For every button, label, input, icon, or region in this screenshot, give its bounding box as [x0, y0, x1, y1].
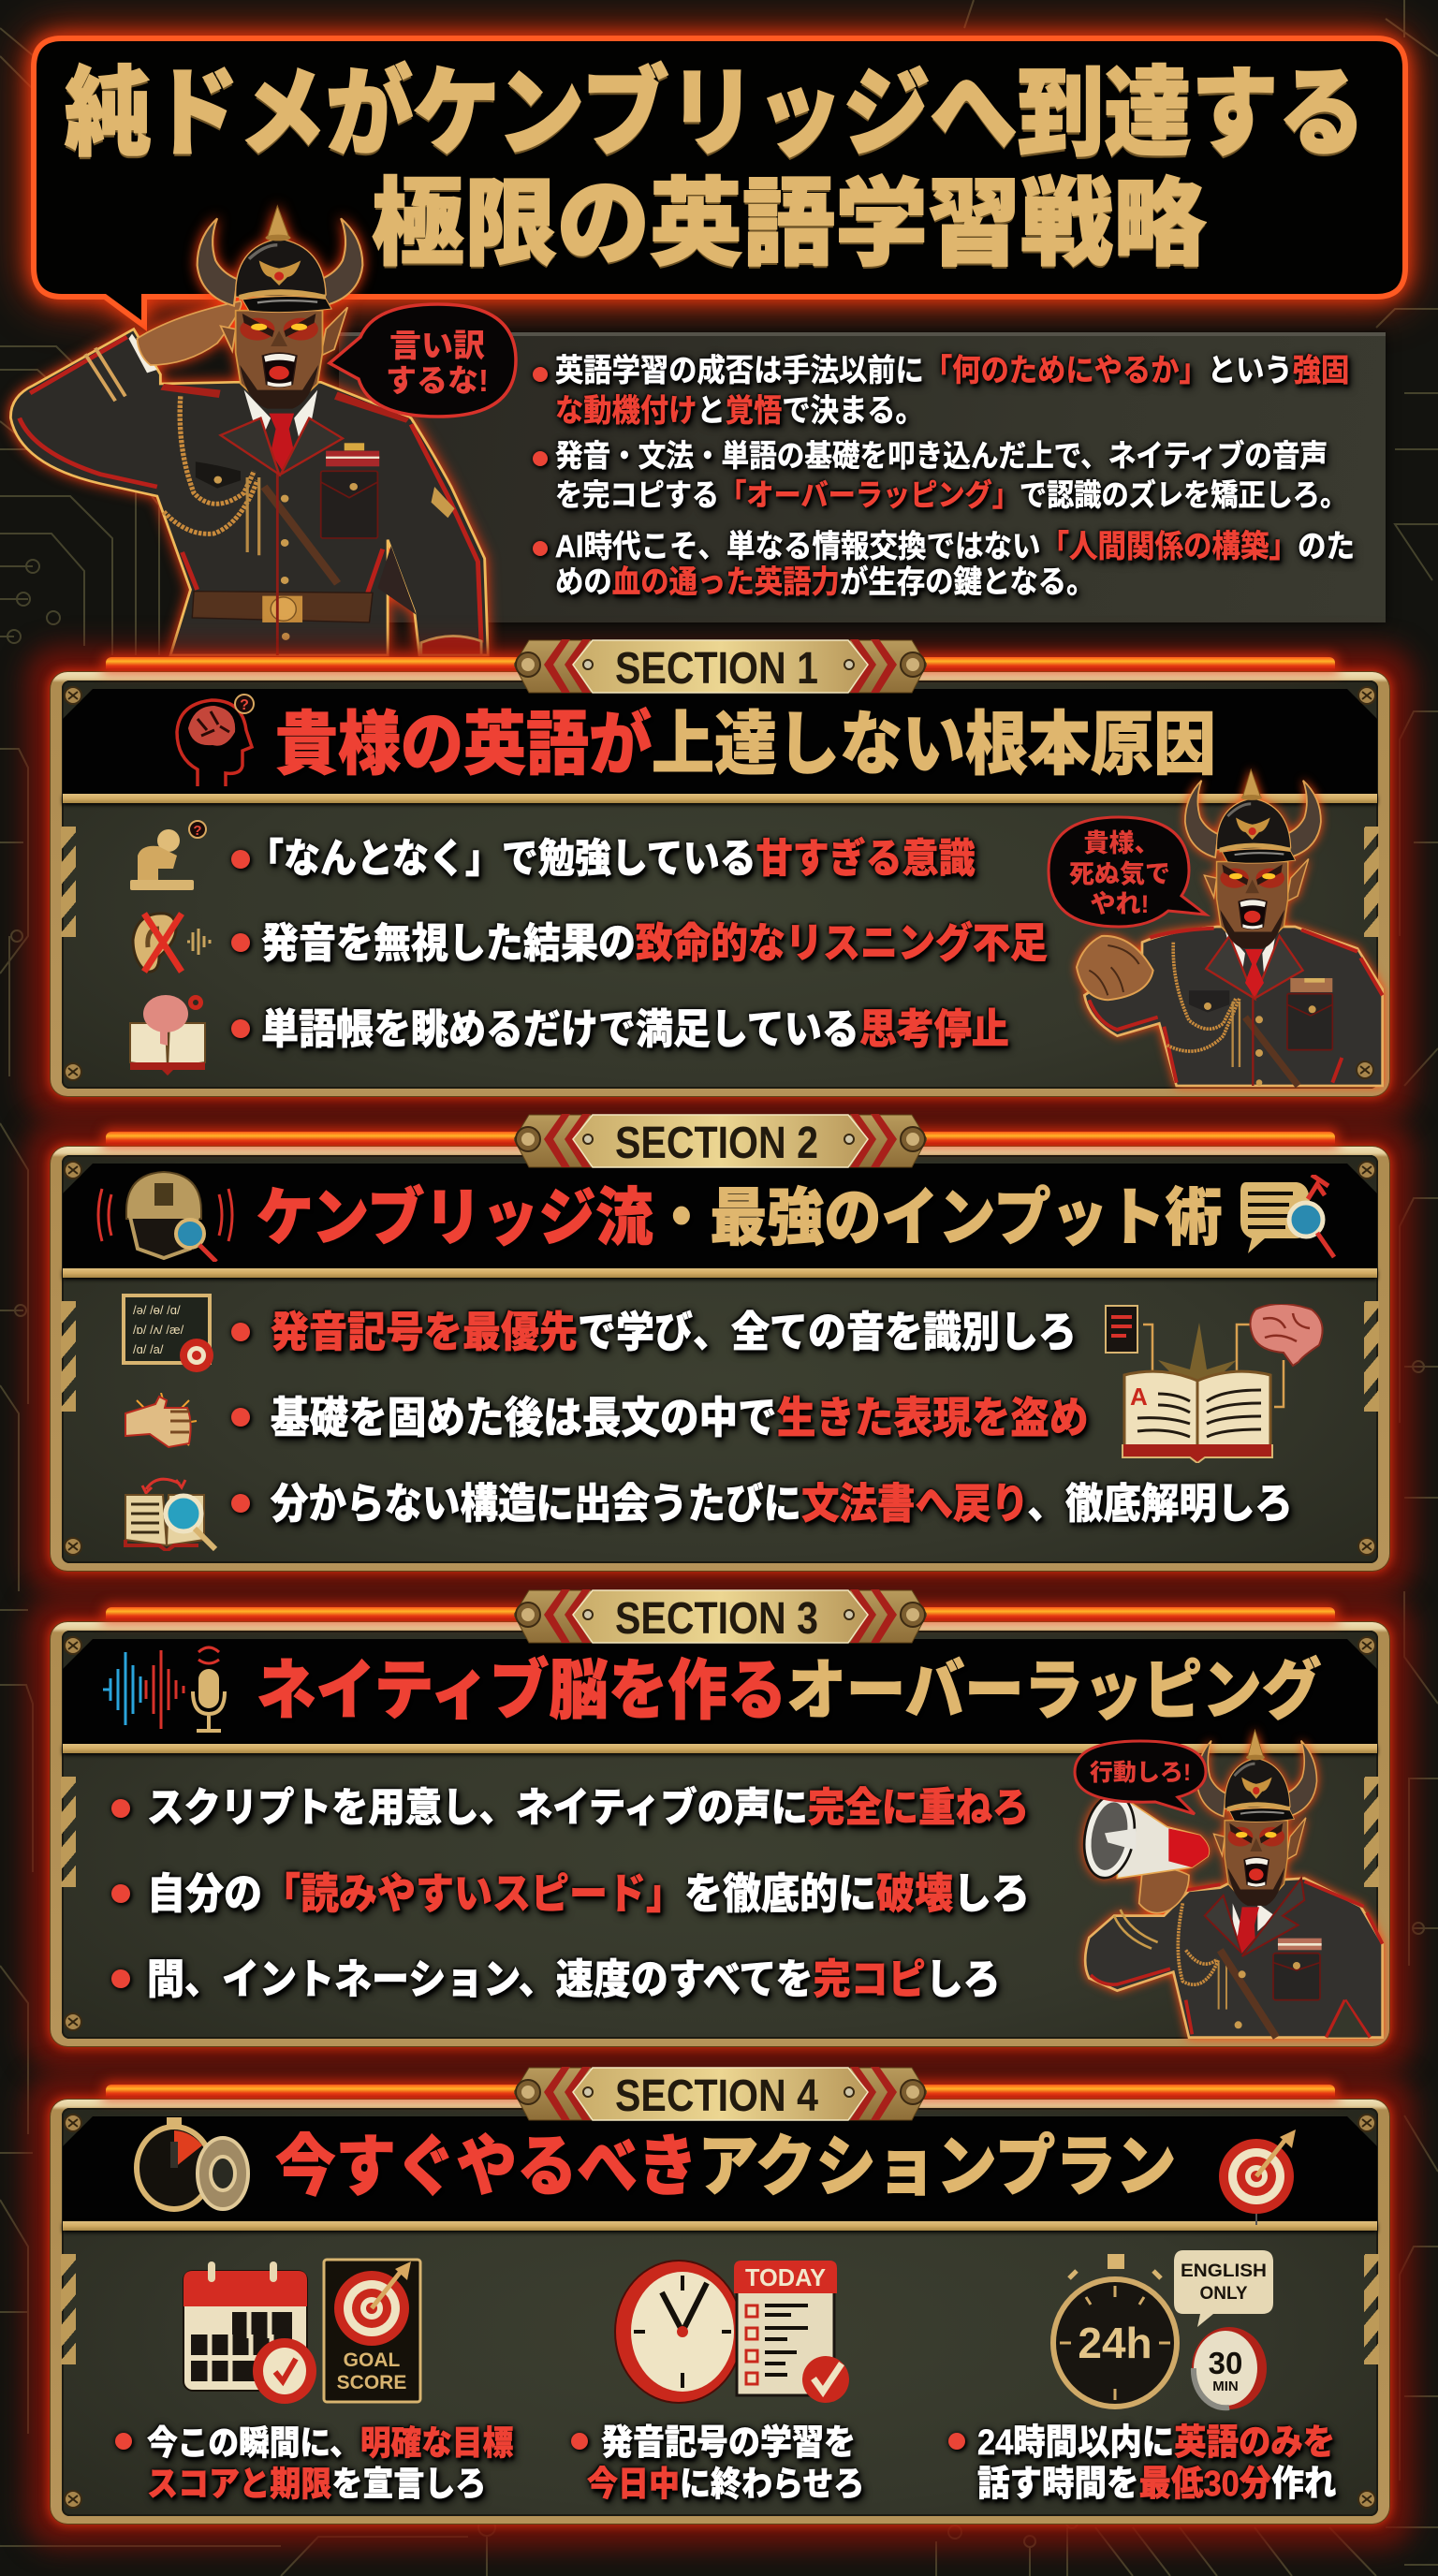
title banner [0, 0, 1438, 342]
section 2 ribbon: SECTION 2 [615, 1119, 818, 1168]
title line 1: 純ドメがケンブリッジへ到達する [65, 59, 1365, 168]
officer head [1196, 1730, 1317, 1906]
bullet point 2: 発音・文法・単語の基礎を叩き込んだ上で、ネイティブの音声 [555, 439, 1328, 474]
megaphone [1078, 1791, 1209, 1881]
section 3 ribbon: SECTION 3 [615, 1594, 818, 1644]
speech bubble: 言い訳するな: するな! [386, 363, 489, 398]
icon: clock and checklist [613, 2259, 857, 2407]
fist [1139, 1868, 1189, 1913]
action 3: stopwatch and english only [945, 2248, 1347, 2510]
icon: helmet and magnifier [97, 1171, 234, 1262]
bullet point 2: を完コピする「オーバーラッピング」で認識のズレを矯正しろ。 [555, 479, 1347, 513]
diagram: book feeding notes and brain: A [1130, 1383, 1148, 1411]
bullet point 1: 英語学習の成否は手法以前に「何のためにやるか」という強固 [555, 354, 1349, 388]
section 1 heading: 貴様の英語が上達しない根本原因 [275, 706, 1216, 783]
panel: section 3 [10, 1588, 1430, 2080]
speech bubble: 行動しろ [1069, 1737, 1247, 1823]
icon: book with magnifier [124, 1472, 219, 1551]
bullet: steal expressions: 基礎を固めた後は長文の中で生きた表現を盗め [271, 1394, 1088, 1442]
icon: phonetics chalkboard and target [122, 1294, 213, 1378]
summary panel [339, 332, 1386, 622]
uniform front [273, 471, 281, 655]
speech bubble: 貴様、死ぬ気でやれ: 貴様、 [1084, 829, 1159, 857]
panel: section 1 [10, 627, 1430, 1129]
icon: calendar and goal card: SCORE [337, 2372, 406, 2393]
icon: clenched fist [124, 1393, 198, 1453]
icon: target with arrow [1211, 2122, 1301, 2229]
icon: clock and checklist: TODAY [745, 2263, 826, 2291]
jacket silhouette [10, 329, 488, 655]
section 2 ribbon [514, 1114, 927, 1168]
icon: 24h stopwatch, bubble and 30 min timer: ONLY [1199, 2284, 1248, 2304]
bullet point 1: な動機付けと覚悟で決まる。 [555, 394, 924, 429]
bullet: awareness: 「なんとなく」で勉強している甘すぎる意識 [247, 838, 976, 882]
panel: section 2 [10, 1113, 1430, 1604]
icon: stopwatch and gear [133, 2117, 257, 2213]
bullet point 3 [530, 527, 1357, 603]
bullet: destroy reading speed: 自分の「読みやすいスピード」を徹底的に破壊しろ [147, 1870, 1030, 1917]
icon: brain over open book [129, 995, 206, 1076]
bullet: shadow the native voice: スクリプトを用意し、ネイティブの声に完全に重ねろ [147, 1786, 1029, 1831]
title line 2: 極限の英語学習戦略 [372, 169, 1206, 277]
section 1 ribbon: SECTION 1 [615, 644, 818, 694]
section 2 heading: ケンブリッジ流・最強のインプット術 [257, 1183, 1223, 1252]
bullet point 3: めの血の通った英語力が生存の鍵となる。 [555, 564, 1095, 600]
icon: waveform and microphone [101, 1645, 229, 1734]
section 3 ribbon [514, 1589, 927, 1644]
icon: phonetics chalkboard and target: /ɑ/ /a/ [133, 1342, 164, 1356]
bullet point 3: AI時代こそ、単なる情報交換ではない「人間関係の構築」のた [555, 529, 1355, 564]
section 4 ribbon: SECTION 4 [615, 2071, 818, 2121]
head [198, 206, 362, 409]
speech bubble: 行動しろ: 行動しろ! [1090, 1760, 1191, 1786]
saluting hand [137, 301, 242, 365]
action 1 text: スコアと期限を宣言しろ [147, 2465, 486, 2503]
icon: 24h stopwatch, bubble and 30 min timer [1049, 2248, 1278, 2413]
section 4 ribbon [514, 2067, 927, 2121]
character: saluting demon officer [0, 200, 500, 657]
action 2 text: 発音記号の学習を [601, 2423, 856, 2463]
action 1 text [147, 2424, 568, 2507]
icon: 24h stopwatch, bubble and 30 min timer: MIN [1212, 2378, 1239, 2394]
character: demon officer with megaphone [1071, 1720, 1389, 2046]
icon: 24h stopwatch, bubble and 30 min timer: ENGLISH [1181, 2261, 1267, 2281]
speech bubble: 言い訳するな [327, 302, 518, 418]
icon: person slumped at desk [130, 820, 207, 890]
action 3 text [977, 2424, 1343, 2507]
section 1 ribbon [514, 639, 927, 694]
icon: phonetics chalkboard and target: /ə/ /ɵ/ /ɑ/ [133, 1303, 181, 1317]
banner frame with speech tail [0, 0, 1438, 342]
speech bubble: 貴様、死ぬ気でやれ [1047, 816, 1211, 929]
icon: head with broken brain: ? [240, 697, 249, 713]
icon: calendar and goal card [178, 2258, 423, 2404]
icon: person slumped at desk: ? [193, 823, 202, 839]
section 3 heading: ネイティブ脳を作るオーバーラッピング [257, 1655, 1321, 1727]
icon: head with broken brain [175, 694, 255, 786]
action 1 text: 今この瞬間に、明確な目標 [147, 2423, 513, 2462]
action 2 text [575, 2424, 949, 2507]
speech bubble: 貴様、死ぬ気でやれ: やれ! [1090, 890, 1150, 918]
action 2 text: 今日中に終わらせろ [587, 2465, 864, 2503]
bullet point 1 [530, 351, 1354, 431]
action 3 text: 話す時間を最低30分作れ [977, 2465, 1336, 2504]
officer head [1185, 769, 1321, 948]
icon: speech bubble with magnifier [1240, 1175, 1336, 1258]
pointing fist [1077, 936, 1153, 1000]
speech bubble: 貴様、死ぬ気でやれ: 死ぬ気で [1069, 860, 1170, 888]
icon: crossed-out ear [131, 912, 212, 973]
bullet: grammar: 分からない構造に出会うたびに文法書へ戻り、徹底解明しろ [271, 1480, 1293, 1527]
icon: 24h stopwatch, bubble and 30 min timer: 30 [1209, 2346, 1242, 2380]
action 1: calendar and goal score [110, 2258, 568, 2510]
bullet: thinking stop: 単語帳を眺めるだけで満足している思考停止 [261, 1007, 1009, 1052]
bullet point 2 [530, 437, 1347, 516]
icon: calendar and goal card: GOAL [344, 2349, 400, 2371]
character: pointing demon officer [1069, 766, 1390, 1093]
speech bubble: 言い訳するな: 言い訳 [389, 329, 485, 364]
diagram: book feeding notes and brain [1096, 1304, 1327, 1463]
bullet: copy everything: 間、イントネーション、速度のすべてを完コピしろ [147, 1957, 1001, 2002]
belt [192, 592, 373, 622]
action 2: clock and today checklist [565, 2258, 949, 2510]
bullet: phonetics: 発音記号を最優先で学び、全ての音を識別しろ [271, 1309, 1077, 1355]
action 3 text: 24時間以内に英語のみを [977, 2423, 1335, 2463]
icon: 24h stopwatch, bubble and 30 min timer: 24h [1078, 2319, 1152, 2367]
bullet: listening: 発音を無視した結果の致命的なリスニング不足 [261, 921, 1048, 966]
icon: phonetics chalkboard and target: /ɒ/ /ʌ/ /æ/ [133, 1323, 184, 1337]
panel: section 4 [10, 2065, 1430, 2564]
section 4 heading: 今すぐやるべきアクションプラン [275, 2130, 1176, 2204]
